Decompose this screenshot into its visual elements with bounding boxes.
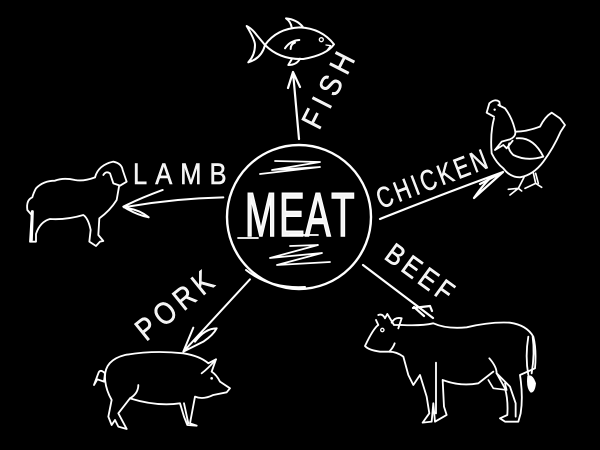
icon: lamb xyxy=(27,162,127,246)
arrow: to fish xyxy=(288,72,300,139)
arrow: to beef xyxy=(363,265,433,318)
icon: chicken xyxy=(487,100,565,195)
hub: meat circle xyxy=(227,145,371,289)
heading: MEAT: MEAT xyxy=(245,180,355,249)
label: CHICKEN: CHICKEN xyxy=(372,144,492,215)
label: LAMB: LAMB xyxy=(133,157,227,190)
icon: fish xyxy=(247,18,334,65)
label: PORK: PORK xyxy=(129,264,221,348)
arrow: to chicken xyxy=(380,172,503,219)
label: BEEF: BEEF xyxy=(379,237,460,308)
arrow: to pork xyxy=(183,279,250,352)
arrow: to lamb xyxy=(123,190,223,217)
icon: cow xyxy=(365,314,536,423)
label: FISH: FISH xyxy=(296,47,362,134)
icon: pig xyxy=(94,352,230,429)
